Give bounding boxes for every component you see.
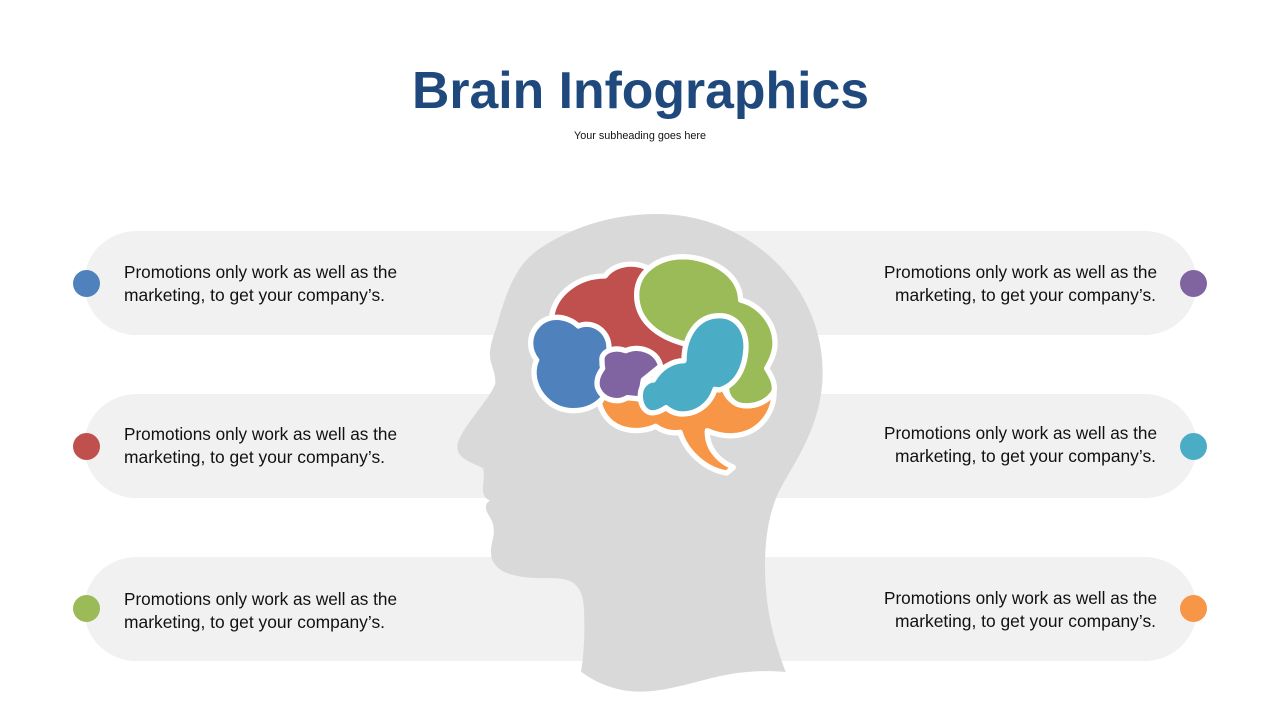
brain lobe: purple bbox=[597, 348, 661, 401]
brain lobe: red bbox=[552, 264, 687, 373]
text: middle left: Promotions only work as well as the bbox=[124, 424, 397, 444]
text: middle left: marketing, to get your company’s. bbox=[124, 447, 385, 467]
text: top right bbox=[884, 262, 1157, 305]
icon: purple dot bbox=[1180, 270, 1207, 297]
subheading: Your subheading goes here bbox=[574, 130, 706, 142]
text: middle left bbox=[124, 424, 397, 467]
text: top left: marketing, to get your company’s. bbox=[124, 285, 385, 305]
panel: top left bbox=[73, 231, 640, 335]
title: Brain Infographics bbox=[412, 62, 869, 120]
text: top right: marketing, to get your company’s. bbox=[895, 285, 1156, 305]
panel: middle right bbox=[640, 394, 1207, 498]
text: bottom left: Promotions only work as well as the bbox=[124, 589, 397, 609]
icon: teal dot bbox=[1180, 433, 1207, 460]
head silhouette bbox=[457, 214, 823, 692]
brain lobe: blue bbox=[531, 317, 623, 411]
text: bottom right bbox=[884, 588, 1157, 631]
icon: green dot bbox=[73, 595, 100, 622]
text: bottom right: Promotions only work as well as the bbox=[884, 588, 1157, 608]
text: bottom left: marketing, to get your company’s. bbox=[124, 612, 385, 632]
icon: blue dot bbox=[73, 270, 100, 297]
panel: bottom right bbox=[640, 557, 1207, 661]
text: top left bbox=[124, 262, 397, 305]
text: bottom right: marketing, to get your company’s. bbox=[895, 611, 1156, 631]
brain lobe: teal bbox=[640, 316, 746, 414]
brain bbox=[531, 257, 775, 473]
text: bottom left bbox=[124, 589, 397, 632]
text: middle right bbox=[884, 423, 1157, 466]
panel: top right bbox=[640, 231, 1207, 335]
panel: bottom left bbox=[73, 557, 640, 661]
brain lobe: orange with stem bbox=[599, 387, 774, 473]
text: top right: Promotions only work as well as the bbox=[884, 262, 1157, 282]
panel: middle left bbox=[73, 394, 640, 498]
text: middle right: Promotions only work as well as the bbox=[884, 423, 1157, 443]
text: middle right: marketing, to get your company’s. bbox=[895, 446, 1156, 466]
icon: red dot bbox=[73, 433, 100, 460]
brain lobe: green bbox=[637, 257, 775, 406]
icon: orange dot bbox=[1180, 595, 1207, 622]
text: top left: Promotions only work as well as the bbox=[124, 262, 397, 282]
